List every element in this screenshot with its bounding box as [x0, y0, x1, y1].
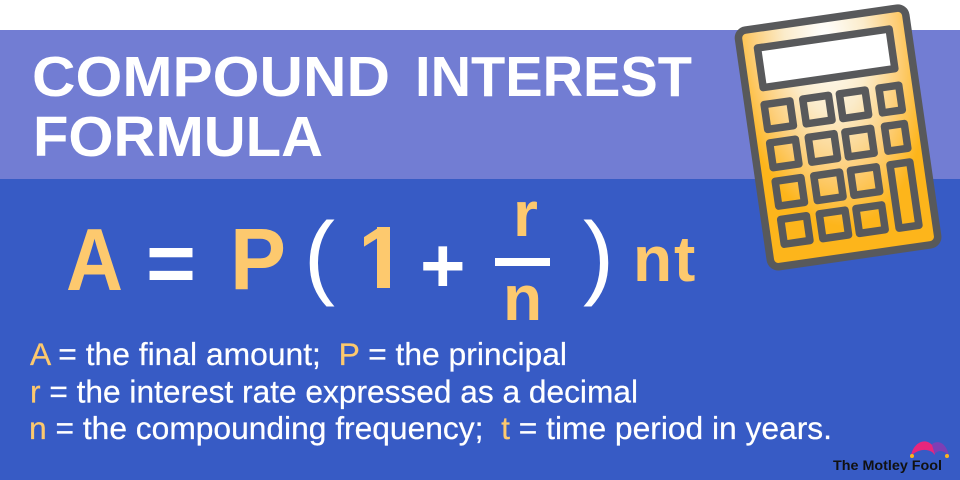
definition line 1: A = the final amount; P = the principal: [30, 336, 567, 372]
panel: formula area: [0, 179, 960, 480]
panel: title band: [0, 30, 960, 179]
title: COMPOUND: [32, 45, 390, 109]
calculator keys: [764, 85, 919, 245]
title: [32, 45, 692, 169]
title: FORMULA: [33, 105, 323, 169]
logo jester hat: [910, 441, 949, 458]
calculator display: [757, 29, 895, 88]
formula: exponent nt: [633, 223, 695, 295]
formula: A: A: [66, 210, 123, 309]
title: INTEREST: [415, 45, 692, 109]
definition line 2: r = the interest rate expressed as a decimal: [30, 374, 638, 410]
formula: 1: [364, 227, 390, 288]
logo wordmark: The Motley Fool: [833, 457, 942, 473]
background: white top strip: [0, 0, 960, 30]
formula: equals: =: [146, 216, 196, 310]
formula: n: n: [503, 262, 542, 334]
calculator body: [737, 7, 939, 268]
formula: left parenthesis: (: [304, 203, 335, 307]
formula: right parenthesis: ): [583, 203, 614, 307]
formula: exponent nt: n: [633, 223, 672, 295]
logo: The Motley Fool: [833, 441, 949, 473]
formula: plus: +: [420, 221, 466, 309]
icon: calculator: [737, 7, 939, 268]
definitions text: [29, 336, 832, 446]
formula: exponent nt: t: [674, 223, 695, 295]
formula: P: P: [230, 211, 286, 308]
formula: [68, 202, 695, 320]
formula: 1: 1: [358, 208, 407, 307]
formula: r: r: [513, 178, 538, 250]
definition line 3: n = the compounding frequency; t = time period in years.: [29, 410, 832, 446]
formula: fraction bar: [495, 258, 550, 266]
